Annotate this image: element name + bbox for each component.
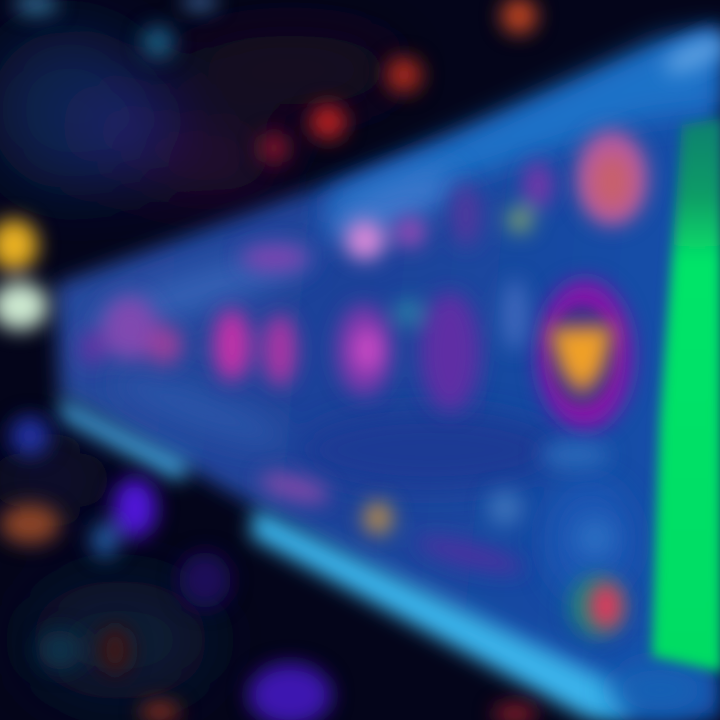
- background glow: lower left: [0, 450, 210, 700]
- lower right multicolour dot: [570, 576, 623, 636]
- middle row of magenta blobs: [79, 279, 528, 412]
- panel top highlight edge: [330, 30, 720, 225]
- panel corner highlight: [659, 29, 720, 81]
- blue bokeh lights: [14, 0, 218, 58]
- small upper icons row: [241, 161, 554, 272]
- lower left orange and violet lights: [0, 478, 537, 720]
- upper right pink circle: [576, 130, 648, 226]
- large purple ring with orange shield: [537, 279, 633, 431]
- yellow and white lights at left edge: [0, 219, 50, 456]
- green vertical bar: [652, 118, 720, 672]
- background glow: upper left: [0, 30, 400, 192]
- lower panel blobs: [257, 441, 615, 581]
- panel inner shading: [80, 158, 710, 720]
- panel lower edge light strip: [60, 398, 640, 720]
- red bokeh lights: [259, 0, 537, 163]
